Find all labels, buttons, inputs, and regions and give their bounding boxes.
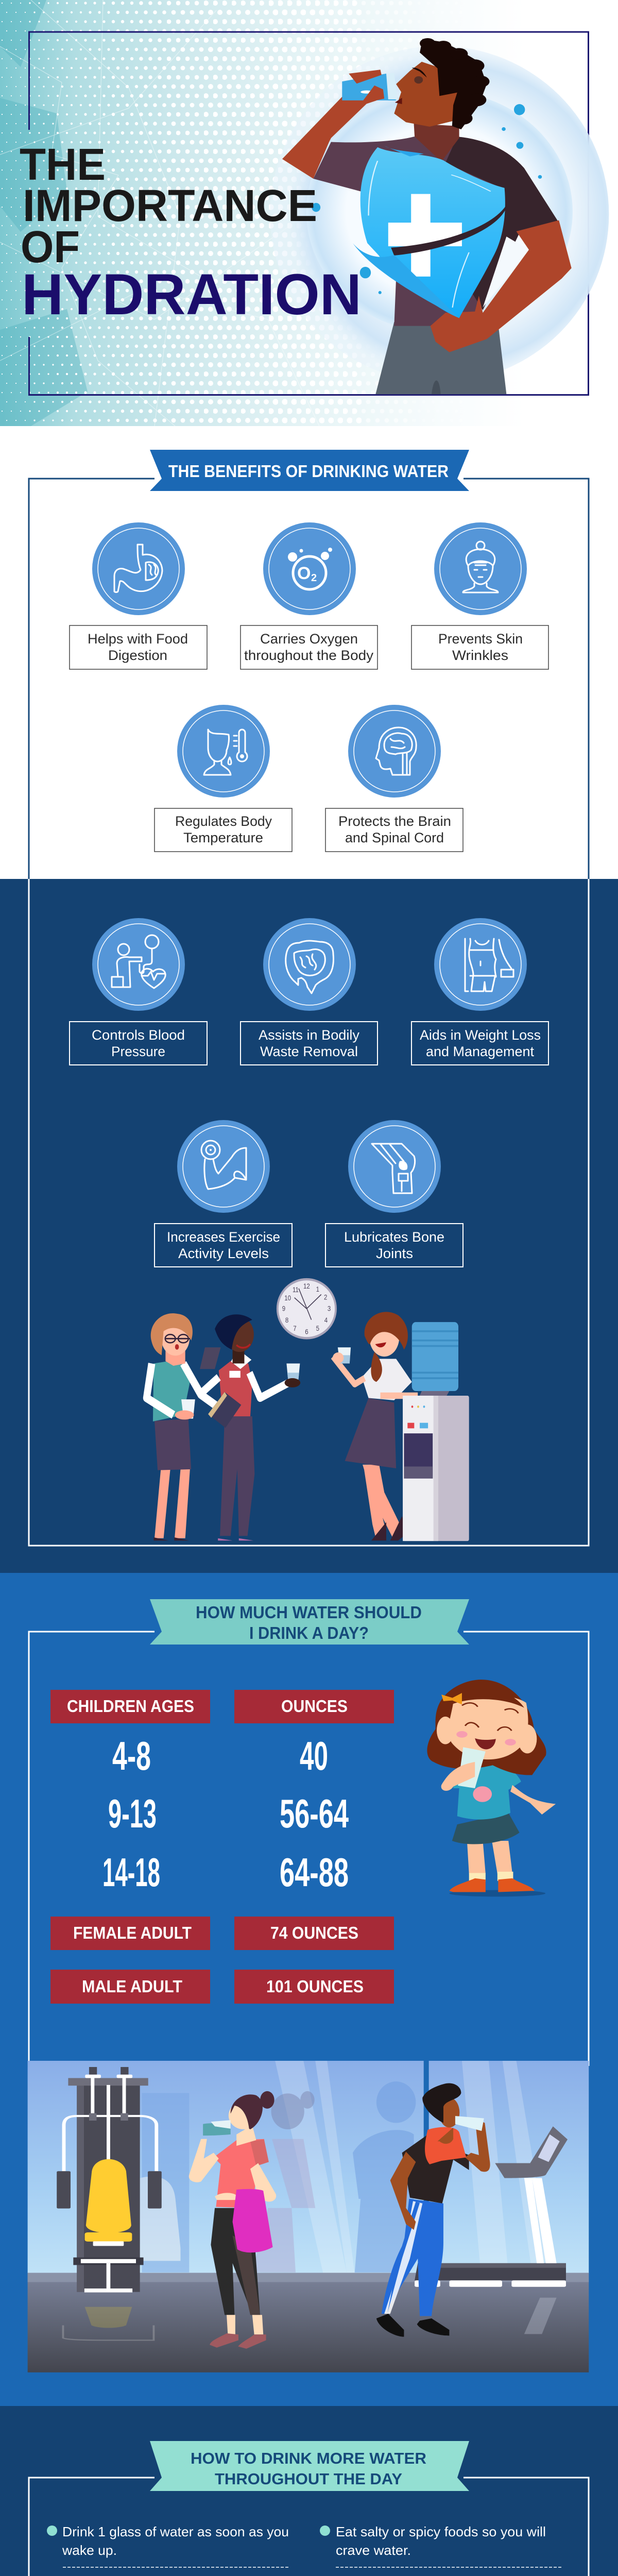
icon: face with towel xyxy=(434,522,527,615)
panel: benefits of drinking water (navy) xyxy=(29,879,589,1546)
benefit: weight loss xyxy=(411,918,548,1065)
label: Wrinkles xyxy=(452,648,508,663)
icon: oxygen: 2 xyxy=(311,572,317,584)
fingers xyxy=(349,70,384,104)
label: Assists in Bodily xyxy=(259,1027,359,1043)
label xyxy=(154,1224,292,1267)
shield xyxy=(360,147,505,318)
benefit: brain and spinal cord xyxy=(325,705,463,852)
row: male adult xyxy=(50,1970,394,2004)
title xyxy=(20,140,362,327)
row: female adult xyxy=(50,1917,394,1950)
label: Controls Blood xyxy=(92,1027,185,1043)
label: Carries Oxygen xyxy=(260,631,358,647)
wall clock: 5 xyxy=(316,1325,319,1332)
label xyxy=(70,1022,207,1065)
icon: stomach xyxy=(92,522,185,615)
treadmill reflection xyxy=(524,2298,557,2334)
tip 1: Drink 1 glass of water as soon as you xyxy=(62,2524,289,2539)
row: male adult: 101 OUNCES xyxy=(266,1977,364,1996)
water bubble xyxy=(270,46,609,382)
header: ounces: OUNCES xyxy=(281,1697,348,1716)
header: children ages xyxy=(50,1690,210,1723)
panel: how to drink more water xyxy=(29,2441,589,2576)
banner: the benefits xyxy=(150,450,469,491)
tip 1 xyxy=(47,2524,289,2558)
woman at cooler xyxy=(333,1312,418,1540)
label: Helps with Food xyxy=(88,631,188,647)
neck xyxy=(414,124,459,162)
label: Temperature xyxy=(183,830,263,845)
panel: how much water xyxy=(28,1599,589,2372)
title: THE xyxy=(20,140,106,190)
benefit: body temperature xyxy=(154,705,292,852)
icon: blood pressure xyxy=(92,918,185,1011)
label: Waste Removal xyxy=(260,1044,358,1059)
icon: muscle and dumbbell xyxy=(177,1120,270,1213)
icon: brain xyxy=(348,705,441,798)
numbers: ounces xyxy=(280,1733,349,1895)
benefit: exercise activity xyxy=(154,1120,292,1267)
right arm xyxy=(431,221,572,352)
icon: knee joint xyxy=(348,1120,441,1213)
benefits frame xyxy=(29,479,589,879)
treadmill xyxy=(415,2126,568,2287)
weight machine xyxy=(57,2067,162,2293)
numbers: ounces: 40 xyxy=(300,1733,328,1778)
shirt xyxy=(313,137,558,326)
label xyxy=(241,1022,377,1065)
water droplets xyxy=(312,104,542,294)
panel: benefits of drinking water (white) xyxy=(29,450,589,879)
numbers: ounces: 56-64 xyxy=(280,1791,349,1836)
numbers: children ages: 14-18 xyxy=(102,1850,160,1895)
label xyxy=(241,625,377,669)
wall clock: 4 xyxy=(324,1316,328,1324)
wall clock: 1 xyxy=(316,1285,319,1293)
banner: how to drink more water xyxy=(150,2441,469,2491)
swoosh xyxy=(391,204,507,256)
wall clock: 7 xyxy=(293,1325,297,1332)
label: and Management xyxy=(426,1044,534,1059)
label: Aids in Weight Loss xyxy=(420,1027,541,1043)
row: female adult: FEMALE ADULT xyxy=(73,1923,192,1942)
woman with tablet xyxy=(200,1314,300,1540)
banner: the benefits: THE BENEFITS OF DRINKING WATER xyxy=(168,462,449,481)
hero background xyxy=(0,0,618,426)
illustration: man drinking water with shield xyxy=(270,38,609,394)
benefit: bone joints xyxy=(325,1120,463,1267)
label xyxy=(325,808,463,852)
label xyxy=(70,625,207,669)
label: Pressure xyxy=(111,1044,165,1059)
icon: oxygen xyxy=(263,522,356,615)
label xyxy=(411,1022,548,1065)
icon: oxygen: O xyxy=(297,564,311,583)
arm gap xyxy=(483,236,529,308)
woman with glasses xyxy=(147,1313,225,1540)
numbers: ounces: 64-88 xyxy=(280,1850,349,1895)
numbers: children ages: 4-8 xyxy=(112,1733,151,1778)
illustration: office women at water cooler xyxy=(147,1279,469,1541)
table: water per day xyxy=(50,1690,394,2004)
machine floor reflection xyxy=(63,2307,153,2340)
icon: sweating man with thermometer xyxy=(177,705,270,798)
wall clock: 3 xyxy=(328,1305,331,1313)
section frame xyxy=(29,2478,589,2576)
label xyxy=(411,625,548,669)
hero frame xyxy=(29,32,588,395)
row: female adult: 74 OUNCES xyxy=(270,1923,358,1942)
label: throughout the Body xyxy=(244,648,374,663)
wall clock: 11 xyxy=(293,1286,299,1294)
icon: intestines xyxy=(263,918,356,1011)
hair xyxy=(420,38,490,129)
illustration: gym scene xyxy=(28,2061,589,2372)
banner: how to drink more water: THROUGHOUT THE DAY xyxy=(215,2470,402,2488)
mirror reflections xyxy=(140,2081,416,2273)
raised arm xyxy=(282,87,382,179)
tip 1: wake up. xyxy=(62,2543,117,2558)
wall clock: 8 xyxy=(285,1316,288,1324)
panel: hero xyxy=(0,0,618,426)
illustration: girl drinking water xyxy=(427,1680,556,1896)
section frame xyxy=(29,1632,589,2066)
label xyxy=(325,1224,463,1267)
glass xyxy=(342,74,396,100)
banner: how much water: HOW MUCH WATER SHOULD xyxy=(196,1603,422,1622)
header: ounces xyxy=(234,1690,394,1723)
wall clock: 2 xyxy=(324,1294,327,1301)
list: right column tips xyxy=(320,2524,562,2576)
title: OF xyxy=(21,222,80,272)
numbers: children ages xyxy=(102,1733,160,1895)
tip 9: Eat salty or spicy foods so you will xyxy=(336,2524,546,2539)
benefit: waste removal xyxy=(241,918,377,1065)
benefit: blood pressure xyxy=(70,918,207,1065)
label: Lubricates Bone xyxy=(344,1229,444,1245)
trousers xyxy=(375,322,506,394)
divider xyxy=(63,2567,289,2568)
divider xyxy=(336,2567,562,2568)
tip 9 xyxy=(320,2524,546,2558)
water cooler xyxy=(403,1322,469,1541)
wall clock xyxy=(278,1279,336,1338)
woman drinking with pink towel xyxy=(189,2091,276,2349)
banner: how much water: I DRINK A DAY? xyxy=(249,1623,369,1642)
tip 9: crave water. xyxy=(336,2543,411,2558)
banner: how to drink more water: HOW TO DRINK MORE WATER xyxy=(191,2449,426,2467)
label: Increases Exercise xyxy=(167,1229,280,1245)
row: male adult: MALE ADULT xyxy=(82,1977,182,1996)
label: Regulates Body xyxy=(175,814,272,829)
benefit: carries oxygen xyxy=(241,522,377,669)
list: left column tips xyxy=(47,2524,291,2576)
numbers: children ages: 9-13 xyxy=(108,1791,157,1836)
wall clock: 12 xyxy=(303,1282,310,1290)
label: and Spinal Cord xyxy=(345,830,444,845)
title: HYDRATION xyxy=(22,262,362,327)
title: IMPORTANCE xyxy=(23,181,317,231)
header: children ages: CHILDREN AGES xyxy=(67,1697,194,1716)
label xyxy=(154,808,292,852)
label: Activity Levels xyxy=(178,1246,269,1261)
icon: waist xyxy=(434,918,527,1011)
banner: how much water xyxy=(150,1599,469,1645)
wall clock: 10 xyxy=(284,1294,291,1302)
navy frame xyxy=(29,879,589,1546)
man drinking with towel xyxy=(376,2083,490,2337)
label: Digestion xyxy=(108,648,167,663)
label: Protects the Brain xyxy=(338,814,451,829)
benefit: food digestion xyxy=(70,522,207,669)
wall clock: 6 xyxy=(305,1328,308,1336)
benefit: skin wrinkles xyxy=(411,522,548,669)
label: Prevents Skin xyxy=(438,631,523,647)
gym background xyxy=(28,2061,589,2372)
label: Joints xyxy=(376,1246,413,1261)
cross xyxy=(388,194,462,277)
wall clock: 9 xyxy=(282,1305,285,1313)
head xyxy=(394,62,461,127)
